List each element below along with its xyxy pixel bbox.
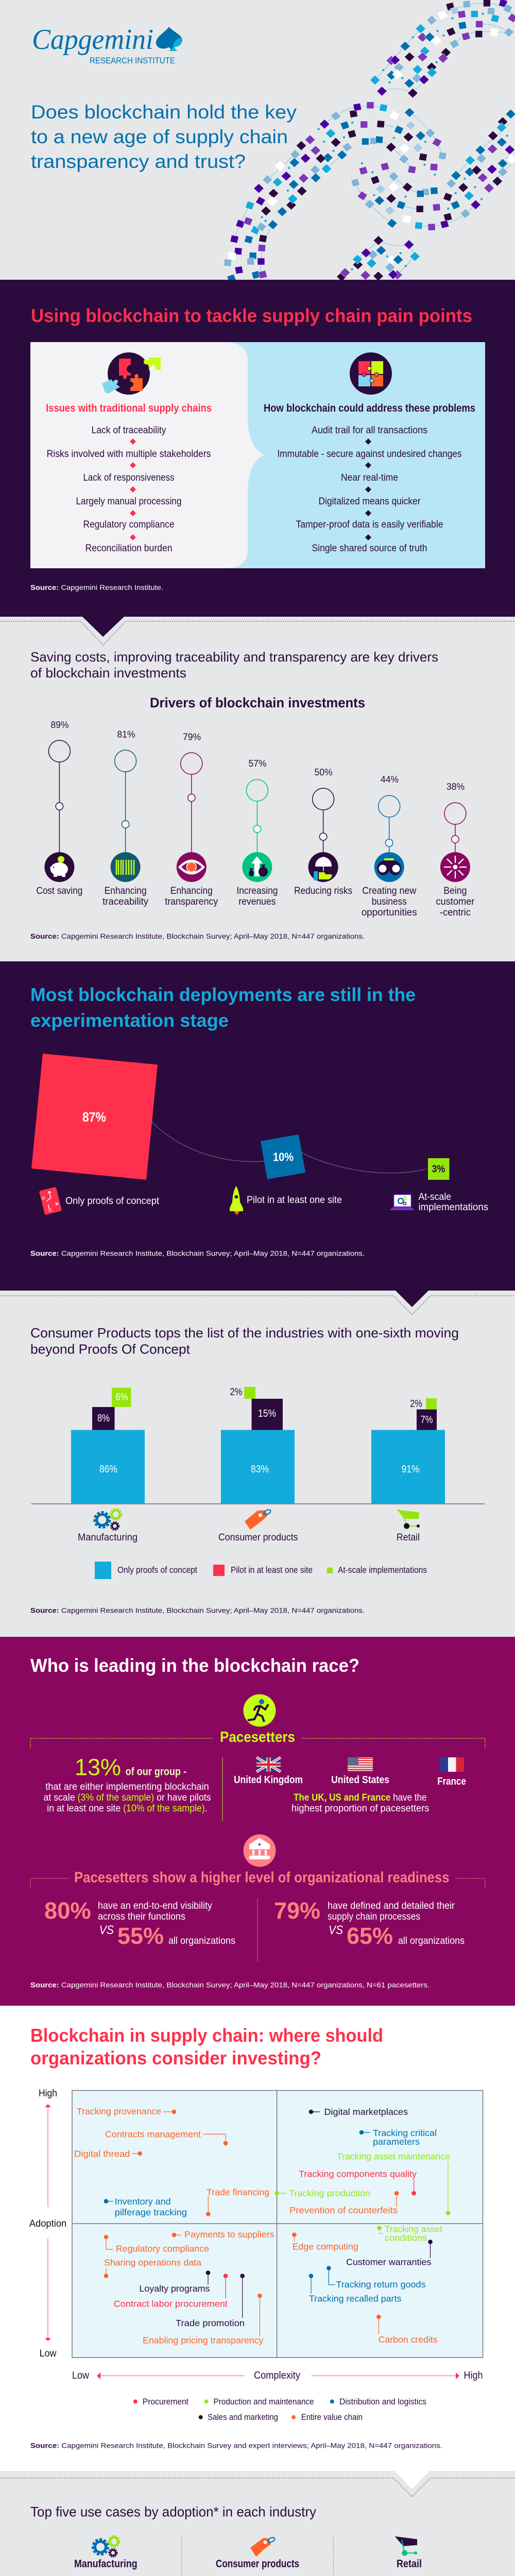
bar chart: consumer products: 2% <box>230 1386 243 1398</box>
stat: 13% pacesetters: at scale (3% of the sample) or have pilots <box>43 1792 211 1803</box>
panel: industries <box>0 1291 515 1637</box>
heading: Most blockchain deployments are still in the <box>30 984 416 1005</box>
stat: 13% pacesetters: in at least one site (10% of the sample). <box>47 1803 208 1814</box>
axis labels: Manufacturing <box>78 1532 138 1543</box>
legend: Pilot in at least one site <box>231 1565 313 1575</box>
data point: Contracts management <box>105 2129 228 2145</box>
data point: Customer warranties <box>346 2240 433 2267</box>
icon: gears <box>95 1509 121 1530</box>
data point: Trade financing: Trade financing <box>207 2187 269 2197</box>
stat: 80% vs 55% <box>44 1897 235 1949</box>
y axis: High <box>39 2088 57 2099</box>
chart: enhancing transparency 79% <box>165 732 218 907</box>
chart: creating new business opportunities 44%: 44% <box>381 774 399 785</box>
icon: growth arrow and bags <box>242 852 272 882</box>
panel: top five use cases <box>0 2471 515 2576</box>
heading: pacesetters <box>30 1729 485 1749</box>
text: highest proportion of pacesetters <box>291 1792 430 1814</box>
stat: 79% vs 65%: 65% <box>347 1923 393 1949</box>
bar chart: retail: 91% <box>402 1464 420 1475</box>
list: how blockchain could address these problems: Tamper-proof data is easily verifiable <box>296 519 443 530</box>
data point: Enabling pricing transparency: Enabling pricing transparency <box>143 2335 264 2346</box>
chart: creating new business opportunities 44%: opportunities <box>362 907 417 918</box>
legend <box>95 1562 427 1579</box>
stat: 13% pacesetters <box>43 1754 211 1814</box>
source: Source: Capgemini Research Institute, Blockchain Survey; April–May 2018, N=447 organizations. <box>30 1606 365 1615</box>
icon: solved puzzle <box>350 352 392 395</box>
stat: 80% vs 55%: all organizations <box>168 1936 235 1946</box>
stat: 80% vs 55%: have an end-to-end visibility <box>98 1901 212 1911</box>
data point: Contract labor procurement <box>114 2274 228 2309</box>
stat: 79% vs 65%: 79% <box>274 1897 320 1924</box>
legend: value chain areas: Production and maintenance <box>213 2397 314 2406</box>
heading: organizational readiness: Pacesetters show a higher level of organizational readiness <box>74 1870 449 1886</box>
column: manufacturing <box>42 2536 169 2576</box>
heading: Top five use cases by adoption* in each industry <box>30 2504 316 2520</box>
icon: shopping cart <box>397 1509 420 1529</box>
chart: enhancing traceability 81%: Enhancing <box>105 886 147 896</box>
data point: Trade promotion <box>176 2274 245 2328</box>
heading: beyond Proofs Of Concept <box>30 1342 191 1357</box>
list: issues with traditional supply chains: Lack of traceability <box>92 425 166 436</box>
icon: barcode <box>111 852 141 882</box>
heading <box>30 1325 459 1357</box>
stat: 13% pacesetters: 13% <box>75 1754 121 1781</box>
flag: United Kingdom: United Kingdom <box>234 1774 303 1786</box>
icon: converging arrows <box>440 852 470 882</box>
chart: creating new business opportunities 44%: Creating new <box>362 886 416 896</box>
chart: cost saving 89%: 89% <box>50 720 69 730</box>
panel: supply chain pain points <box>0 280 515 617</box>
stat: 79% vs 65% <box>274 1897 465 1949</box>
data point: Tracking asset maintenance: Tracking asset maintenance <box>337 2151 450 2161</box>
bar chart: retail <box>371 1398 445 1503</box>
heading: organizations consider investing? <box>30 2047 321 2069</box>
chart: being customer-centric 38%: Being <box>443 886 467 896</box>
chart: being customer-centric 38% <box>436 782 475 918</box>
list: how blockchain could address these problems: Immutable - secure against undesired changes <box>277 449 461 460</box>
data point: Regulatory compliance: Regulatory compliance <box>116 2244 209 2254</box>
legend: at-scale implementations <box>389 1192 488 1213</box>
icon: eye <box>177 852 207 882</box>
icon: price tag <box>250 2536 276 2556</box>
list: issues with traditional supply chains: Largely manual processing <box>76 496 181 507</box>
icon: price tag <box>245 1509 271 1530</box>
data point: Inventory and pilferage tracking: Inventory and <box>115 2196 171 2207</box>
chart: cost saving 89% <box>36 720 82 896</box>
icon: shopping cart <box>395 2536 417 2556</box>
data point: Carbon credits <box>376 2315 438 2345</box>
title: to a new age of supply chain <box>31 126 288 147</box>
chart title: Drivers of blockchain investments <box>150 695 365 710</box>
stat: 13% pacesetters: that are either implementing blockchain <box>45 1782 209 1792</box>
axis labels: Retail <box>397 1532 420 1543</box>
bar chart: consumer products <box>221 1386 295 1503</box>
bar chart: retail: 2% <box>410 1398 422 1410</box>
list: issues with traditional supply chains: Risks involved with multiple stakeholders <box>46 449 211 460</box>
chart: increasing revenues 57%: Increasing <box>236 886 278 896</box>
data point: Loyalty programs: Loyalty programs <box>139 2283 210 2294</box>
comparison card <box>30 342 485 568</box>
data point: Inventory and pilferage tracking: pilferage tracking <box>115 2207 187 2217</box>
y axis: Low <box>39 2348 57 2359</box>
column: consumer products: Consumer products <box>216 2558 299 2570</box>
stat: 79% vs 65%: have defined and detailed their <box>328 1901 455 1911</box>
chart: 10% pilot in at least one site <box>261 1134 305 1179</box>
flag: France <box>437 1757 466 1787</box>
column: manufacturing: Manufacturing <box>74 2558 138 2570</box>
heading: pacesetters: Pacesetters <box>220 1729 295 1745</box>
data point: Contracts management: Contracts management <box>105 2129 201 2140</box>
chart: increasing revenues 57%: revenues <box>238 896 276 907</box>
stat: 79% vs 65%: VS <box>329 1923 343 1937</box>
heading: Who is leading in the blockchain race? <box>30 1655 359 1676</box>
icon: binoculars <box>374 852 404 882</box>
flag: United Kingdom <box>234 1757 303 1786</box>
chart: 3% at-scale implementations: 3% <box>432 1163 445 1175</box>
data point: Digital marketplaces: Digital marketplaces <box>324 2107 408 2117</box>
text: highest proportion of pacesetters: highest proportion of pacesetters <box>291 1803 430 1814</box>
chart: 87% only proofs of concept: 87% <box>82 1109 106 1125</box>
data point: Trade financing <box>206 2187 269 2216</box>
chart: creating new business opportunities 44%: business <box>372 896 407 907</box>
icon: runner <box>243 1694 276 1727</box>
y axis: Adoption <box>29 2218 66 2229</box>
data point: Edge computing: Edge computing <box>293 2241 358 2251</box>
heading <box>30 649 438 681</box>
heading: Consumer Products tops the list of the industries with one-sixth moving <box>30 1325 459 1341</box>
list: how blockchain could address these problems: How blockchain could address these problems <box>264 402 475 414</box>
heading: Saving costs, improving traceability and transparency are key drivers <box>30 649 438 665</box>
list: issues with traditional supply chains: Issues with traditional supply chains <box>46 402 212 414</box>
chart: reducing risks 50% <box>294 767 352 896</box>
logo: Capgemini Research Institute <box>32 24 182 65</box>
logo: Capgemini Research Institute: RESEARCH INSTITUTE <box>90 56 175 65</box>
illustration: blockchain links made of squares <box>224 0 515 283</box>
data point: Tracking critical parameters: parameters <box>373 2137 420 2147</box>
legend: only proofs of concept <box>39 1187 160 1215</box>
bar chart: manufacturing: 8% <box>97 1413 110 1424</box>
legend: at-scale implementations: At-scale <box>418 1192 451 1202</box>
chart: increasing revenues 57%: 57% <box>248 758 267 769</box>
flag: United States <box>331 1757 389 1786</box>
chart: increasing revenues 57% <box>236 758 278 907</box>
list: issues with traditional supply chains: Lack of responsiveness <box>83 472 174 483</box>
chart: cost saving 89%: Cost saving <box>36 886 82 896</box>
bar chart: manufacturing <box>71 1388 145 1503</box>
panel: hero <box>0 0 515 283</box>
list: how blockchain could address these problems: Audit trail for all transactions <box>312 425 427 436</box>
panel: who is leading <box>0 1637 515 2006</box>
data point: Tracking critical parameters <box>359 2128 437 2147</box>
icon: gears <box>93 2536 119 2556</box>
data point: Regulatory compliance <box>104 2235 209 2254</box>
data point: Prevention of counterfeits: Prevention of counterfeits <box>289 2205 398 2215</box>
legend: value chain areas: Sales and marketing <box>208 2412 278 2422</box>
heading: Blockchain in supply chain: where should <box>30 2025 383 2046</box>
legend: value chain areas: Distribution and logistics <box>339 2397 426 2406</box>
data point: Tracking recalled parts: Tracking recalled parts <box>309 2293 402 2303</box>
source: Source: Capgemini Research Institute, Blockchain Survey and expert interviews; April–May 2018, N=447 organizations. <box>30 2441 442 2449</box>
chart: enhancing transparency 79%: 79% <box>183 732 201 742</box>
icon: piggy bank <box>44 852 74 882</box>
title <box>31 101 297 172</box>
data point: Contract labor procurement: Contract labor procurement <box>114 2299 228 2309</box>
icon: laptop <box>389 1194 415 1210</box>
list: how blockchain could address these problems: Near real-time <box>341 472 398 483</box>
chart: creating new business opportunities 44% <box>362 774 417 918</box>
list: issues with traditional supply chains <box>46 402 212 554</box>
legend: pilot in at least one site: Pilot in at least one site <box>247 1195 342 1206</box>
data point: Tracking provenance: Tracking provenance <box>77 2106 161 2116</box>
x axis: complexity: Complexity <box>254 2370 300 2381</box>
data point: Customer warranties: Customer warranties <box>346 2257 432 2267</box>
flag: United States: United States <box>331 1774 389 1786</box>
chart: 87% only proofs of concept <box>31 1054 158 1180</box>
list: issues with traditional supply chains: Reconciliation burden <box>85 543 172 554</box>
legend: At-scale implementations <box>338 1565 427 1575</box>
chart: enhancing transparency 79%: transparency <box>165 896 218 907</box>
source: Source: Capgemini Research Institute, Blockchain Survey; April–May 2018, N=447 organizations. <box>30 932 365 940</box>
chart: adoption vs complexity matrix <box>29 2088 483 2359</box>
source: Source: Capgemini Research Institute, Blockchain Survey; April–May 2018, N=447 organizations, N=61 pacesetters. <box>30 1980 430 1989</box>
data point: Sharing operations data: Sharing operations data <box>104 2258 201 2268</box>
chart: enhancing traceability 81% <box>102 730 149 907</box>
bar chart: retail: 7% <box>420 1414 433 1426</box>
heading: of blockchain investments <box>30 665 186 681</box>
column: retail: Retail <box>397 2558 422 2570</box>
list: how blockchain could address these problems <box>264 402 475 554</box>
icon: institution <box>243 1834 276 1867</box>
data point: Tracking critical parameters: Tracking critical <box>373 2128 437 2138</box>
legend: value chain areas <box>133 2397 426 2422</box>
list: how blockchain could address these problems: Single shared source of truth <box>312 543 427 554</box>
data point: Tracking asset conditions: conditions <box>385 2232 427 2243</box>
panel: drivers of blockchain investments <box>0 617 515 961</box>
icon: umbrella and hand <box>308 852 338 882</box>
chart: 3% at-scale implementations <box>428 1158 449 1180</box>
chart: being customer-centric 38%: -centric <box>440 907 471 918</box>
data point: Tracking components quality: Tracking components quality <box>299 2169 417 2179</box>
bar chart: manufacturing: 6% <box>116 1392 128 1403</box>
data point: Tracking components quality <box>299 2169 417 2195</box>
stat: 80% vs 55%: 55% <box>117 1923 164 1949</box>
data point: Tracking return goods <box>327 2266 426 2290</box>
title: Does blockchain hold the key <box>31 101 297 123</box>
data point: Tracking production: Tracking production <box>289 2188 370 2198</box>
chart: being customer-centric 38%: 38% <box>447 782 465 792</box>
axis labels: Consumer products <box>218 1532 298 1543</box>
data point: Enabling pricing transparency <box>143 2294 264 2346</box>
stat: 79% vs 65%: all organizations <box>398 1936 465 1946</box>
y axis <box>29 2088 66 2359</box>
stat: 80% vs 55%: 80% <box>44 1897 91 1924</box>
icon: rocket <box>230 1186 243 1215</box>
legend: value chain areas: Entire value chain <box>301 2412 363 2422</box>
logo: Capgemini Research Institute: Capgemini <box>32 24 153 56</box>
data point: Carbon credits: Carbon credits <box>379 2334 438 2345</box>
data point: Sharing operations data <box>104 2258 201 2278</box>
stat: 80% vs 55%: across their functions <box>98 1911 185 1922</box>
x axis: complexity: Low <box>72 2370 89 2381</box>
x axis: complexity: High <box>464 2370 483 2381</box>
data point: Tracking return goods: Tracking return goods <box>336 2279 426 2290</box>
data point: Tracking asset conditions: Tracking asset <box>385 2224 442 2234</box>
data point: Tracking asset conditions <box>377 2224 442 2243</box>
data point: Prevention of counterfeits <box>289 2191 399 2215</box>
legend: only proofs of concept: Only proofs of concept <box>65 1196 160 1207</box>
chart: enhancing traceability 81%: traceability <box>102 896 149 907</box>
heading <box>30 2025 383 2069</box>
chart: being customer-centric 38%: customer <box>436 896 475 907</box>
stat: 80% vs 55%: VS <box>99 1923 114 1937</box>
axis labels <box>78 1532 420 1543</box>
connector: dotted curves <box>152 1122 427 1173</box>
heading: experimentation stage <box>30 1010 229 1031</box>
heading <box>30 984 416 1031</box>
text: highest proportion of pacesetters: The UK, US and France have the <box>294 1792 426 1803</box>
icon: strategy card <box>39 1187 62 1215</box>
stat: 79% vs 65%: supply chain processes <box>328 1911 420 1922</box>
panel: where to invest <box>0 2006 515 2471</box>
data point: Payments to suppliers: Payments to suppliers <box>184 2229 274 2240</box>
column: consumer products <box>201 2536 314 2576</box>
data point: Digital thread: Digital thread <box>74 2148 130 2159</box>
data point: Inventory and pilferage tracking <box>104 2196 187 2217</box>
chart: 10% pilot in at least one site: 10% <box>273 1150 294 1163</box>
legend: pilot in at least one site <box>230 1186 342 1215</box>
legend: at-scale implementations: implementations <box>418 1202 488 1213</box>
chart: enhancing traceability 81%: 81% <box>117 730 135 740</box>
panel: experimentation stage <box>0 961 515 1291</box>
stat: 13% pacesetters: of our group - <box>126 1766 186 1777</box>
bar chart: consumer products: 15% <box>258 1408 276 1419</box>
source: Source: Capgemini Research Institute, Blockchain Survey; April–May 2018, N=447 organizations. <box>30 1249 365 1257</box>
legend: Only proofs of concept <box>117 1565 197 1575</box>
data point: Edge computing <box>292 2232 358 2251</box>
icon: scattered puzzle <box>102 352 161 395</box>
data point: Tracking asset maintenance <box>337 2151 450 2215</box>
chart: enhancing transparency 79%: Enhancing <box>170 886 213 896</box>
title: transparency and trust? <box>31 150 246 172</box>
data point: Loyalty programs <box>139 2270 210 2294</box>
chart: reducing risks 50%: Reducing risks <box>294 886 352 896</box>
list: issues with traditional supply chains: Regulatory compliance <box>83 519 174 530</box>
list: how blockchain could address these problems: Digitalized means quicker <box>318 496 421 507</box>
flag: France: France <box>437 1776 466 1787</box>
chart: reducing risks 50%: 50% <box>314 767 333 777</box>
bar chart: consumer products: 83% <box>251 1464 269 1475</box>
column: retail <box>345 2536 482 2576</box>
data point: Trade promotion: Trade promotion <box>176 2318 245 2328</box>
heading: Using blockchain to tackle supply chain pain points <box>31 305 472 326</box>
legend: value chain areas: Procurement <box>143 2397 188 2406</box>
data point: Tracking recalled parts <box>309 2274 402 2303</box>
source: Source: Capgemini Research Institute. <box>30 583 163 591</box>
x axis: complexity <box>72 2370 483 2381</box>
bar chart: manufacturing: 86% <box>99 1464 117 1475</box>
